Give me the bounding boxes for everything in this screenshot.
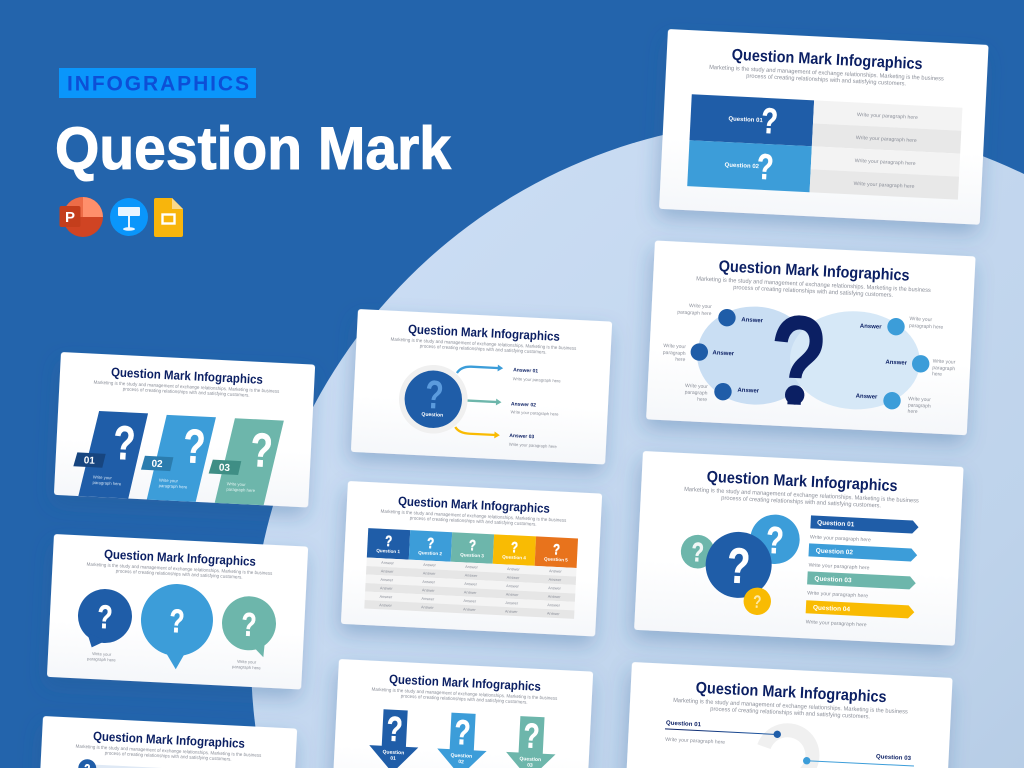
paragraph rows: Write your paragraph here — [853, 181, 915, 190]
heading: Question Mark Infographics — [718, 258, 910, 285]
column header: question 1 — [367, 528, 410, 560]
answer 03 text: Write your paragraph here — [509, 442, 558, 449]
answer labels: Answer — [885, 360, 908, 367]
text block: Marketing is the study and management of exchange relationships. Marketing is the business — [709, 65, 944, 83]
answer table: Answer — [507, 567, 521, 572]
left paragraphs: paragraph — [663, 350, 686, 357]
panel: circles and ribbons slide — [634, 451, 964, 646]
answer 03 text — [509, 433, 558, 449]
column header: question 5 — [535, 536, 578, 568]
text block: process of creating relationships with and satisfying customers. — [420, 343, 547, 356]
arrow: question 03: Question — [519, 756, 541, 763]
arrow: answer 02 — [467, 398, 501, 405]
heading: Question Mark Infographics — [408, 322, 560, 344]
text block: process of creating relationships with and satisfying customers. — [123, 386, 250, 399]
answer table: Answer — [548, 586, 562, 591]
bubble 3 text: Write your — [237, 659, 257, 665]
answer labels — [710, 316, 910, 402]
text block — [371, 687, 558, 707]
bubble 1: ? — [97, 598, 113, 635]
answer table: Answer — [464, 582, 478, 587]
question 01 row — [689, 94, 814, 146]
answer table: Answer — [422, 580, 436, 584]
answer 01 text: Write your paragraph here — [513, 376, 561, 383]
answer table: Answer — [422, 588, 435, 593]
column header: question 1: Question 1 — [376, 548, 401, 554]
column header: question 2: Question 2 — [418, 550, 443, 556]
answer table: Answer — [421, 605, 435, 610]
answer labels: Answer — [860, 324, 882, 331]
column header: question 3: ? — [469, 537, 476, 554]
arrow: question 01: ? — [386, 709, 404, 749]
text block: Marketing is the study and management of exchange relationships. Marketing is the business — [673, 698, 908, 716]
paragraph rows: Write your paragraph here — [857, 112, 918, 121]
ribbon: question 04: Question 04 — [813, 604, 851, 613]
icon: keynote — [110, 198, 148, 236]
answer table: Answer — [421, 597, 435, 601]
text block: process of creating relationships with and satisfying customers. — [710, 707, 870, 721]
bubble 3 text: paragraph here — [232, 664, 262, 670]
heading: Question Mark Infographics — [111, 365, 263, 387]
ribbon: question 03: Write your paragraph here — [807, 590, 868, 599]
arrow: answer 01 — [457, 364, 502, 375]
left paragraphs: Write your — [689, 303, 712, 310]
answer table: Answer — [547, 603, 561, 608]
answer table: Answer — [379, 595, 393, 599]
block 02: paragraph here — [159, 483, 188, 489]
arrow: question 01 — [368, 709, 420, 768]
block 02: 02 — [151, 459, 163, 470]
question 01 timeline — [664, 721, 781, 748]
column header: question 5: ? — [553, 541, 560, 559]
answer bar — [86, 764, 197, 768]
arrow: question 02 — [436, 712, 488, 768]
block 03: ? — [249, 424, 274, 478]
block 01: Write your — [93, 474, 113, 480]
arrow: question 01: 01 — [390, 756, 396, 762]
answer table: Answer — [379, 603, 393, 608]
answer table: Answer — [549, 578, 562, 582]
answer table: Answer — [423, 571, 436, 576]
left paragraphs: paragraph here — [677, 309, 712, 317]
text block — [93, 380, 280, 400]
big question mark: ? — [766, 287, 831, 433]
arrow: question 02: 02 — [458, 759, 464, 765]
column header: question 1: ? — [385, 533, 393, 550]
column header: question 4 — [493, 534, 536, 566]
block 03: Write your — [227, 481, 246, 487]
right answer markers — [883, 318, 932, 411]
answer table: Answer — [463, 599, 477, 604]
text block: process of creating relationships with and satisfying customers. — [746, 74, 906, 88]
answer table: Answer — [506, 584, 520, 589]
column header: question 3 — [451, 532, 494, 564]
answer table: Answer — [463, 607, 477, 612]
block 02: Write your — [159, 478, 179, 484]
heading: Question Mark Infographics — [104, 547, 256, 569]
text block: Marketing is the study and management of exchange relationships. Marketing is the business — [75, 744, 262, 759]
panel: cropped timeline slide — [623, 662, 953, 768]
paragraph rows: Write your paragraph here — [855, 158, 916, 167]
text block: process of creating relationships with and satisfying customers. — [105, 750, 232, 763]
block 02: ? — [182, 420, 207, 474]
icon: powerpoint — [60, 197, 103, 237]
question 01 row: ? — [760, 100, 779, 142]
yellow question circle — [743, 587, 772, 616]
heading: Question Mark Infographics — [731, 47, 923, 73]
yellow question circle: ? — [753, 592, 762, 612]
answer table — [364, 558, 577, 619]
text block: process of creating relationships with and satisfying customers. — [410, 515, 537, 528]
answer table: Answer — [381, 569, 394, 574]
answer table: Answer — [505, 609, 518, 614]
ribbon: question 01: Question 01 — [817, 520, 855, 528]
text block: Marketing is the study and management of exchange relationships. Marketing is the business — [371, 687, 558, 702]
panel: venn answers slide — [646, 240, 976, 441]
bubble 3: ? — [241, 605, 257, 643]
ribbon: question 01 — [810, 515, 919, 546]
block 03 — [207, 417, 284, 506]
bubble 2 — [139, 582, 215, 671]
right paragraphs: Write your — [908, 396, 931, 403]
dark question circle: ? — [726, 537, 751, 594]
arrow: question 02: ? — [454, 713, 471, 753]
answer table: Answer — [549, 569, 563, 574]
column header: question 2: ? — [427, 535, 435, 552]
text block — [390, 337, 577, 357]
answer labels: Answer — [855, 394, 878, 401]
answer table: Answer — [464, 590, 477, 595]
question 02 row: Question 02 — [724, 162, 760, 170]
panel: stepped blocks slide — [54, 352, 315, 507]
question 03 timeline: Question 03 — [876, 754, 912, 762]
text block: process of creating relationships with and satisfying customers. — [401, 693, 528, 706]
paragraph rows: Write your paragraph here — [856, 135, 917, 144]
question 02 row — [687, 140, 812, 192]
panel: cropped left slide — [36, 716, 297, 768]
text block: process of creating relationships with and satisfying customers. — [116, 568, 243, 581]
left paragraphs: here — [697, 397, 707, 403]
text block: process of creating relationships with and satisfying customers. — [733, 285, 893, 299]
ribbon: question 01: Write your paragraph here — [810, 534, 871, 543]
left ellipse — [695, 304, 815, 407]
panel: five column table slide — [341, 481, 602, 636]
right paragraphs: paragraph — [908, 402, 931, 410]
question 01 row: Question 01 — [728, 116, 764, 124]
left paragraphs: here — [675, 357, 686, 363]
answer labels: Answer — [741, 317, 764, 324]
block 01: ? — [112, 417, 137, 471]
left paragraphs: Write your — [685, 383, 708, 390]
answer table: Answer — [507, 576, 520, 580]
large light circle — [251, 120, 1024, 768]
answer 01 text — [513, 367, 562, 383]
right paragraphs — [905, 316, 958, 417]
heading: Question Mark Infographics — [695, 680, 887, 706]
text block — [86, 562, 273, 582]
heading: Question Mark Infographics — [706, 469, 898, 495]
answer table: Answer — [423, 563, 437, 568]
question 02 row: ? — [756, 146, 775, 187]
right ellipse — [788, 308, 922, 412]
bubble 3 text — [232, 659, 262, 670]
answer table: Answer — [380, 586, 393, 591]
question circle — [78, 759, 97, 768]
ribbon: question 03: Question 03 — [814, 575, 852, 584]
title: Question Mark — [55, 115, 452, 182]
arrow: answer 03 — [455, 427, 499, 438]
answer 01 text: Answer 01 — [513, 367, 538, 375]
arrow: question 03: ? — [522, 716, 540, 756]
right paragraphs: here — [932, 371, 942, 378]
bubble 1 — [76, 588, 133, 649]
bubble 2: ? — [169, 602, 185, 640]
block 02 — [139, 414, 216, 503]
arrow: question 03 — [505, 715, 557, 768]
panel: answers flow slide — [351, 309, 612, 464]
dark question circle — [704, 530, 773, 599]
text block: Marketing is the study and management of exchange relationships. Marketing is the business — [93, 380, 280, 395]
answer table: Answer — [548, 595, 561, 599]
arrow: question 02: Question — [450, 753, 472, 760]
arrow: question 01: Question — [382, 749, 404, 756]
text block — [75, 744, 262, 764]
right paragraphs: Write your — [909, 316, 933, 323]
left paragraphs: paragraph — [685, 390, 708, 397]
text block — [380, 509, 567, 529]
answer labels: Answer — [737, 388, 760, 395]
answer 02 text: Write your paragraph here — [510, 409, 559, 417]
left paragraphs: Write your — [663, 343, 686, 350]
block 03: paragraph here — [226, 487, 256, 493]
blue question circle: ? — [765, 520, 785, 563]
badge: infographics: INFOGRAPHICS — [67, 72, 249, 96]
panel: speech bubbles slide — [47, 534, 308, 689]
answer table: Answer — [465, 573, 478, 578]
question 01 timeline: Question 01 — [666, 721, 702, 728]
ribbon: question 04: Write your paragraph here — [806, 619, 867, 628]
icon: grey question arc — [762, 729, 814, 768]
answer 02 text: Answer 02 — [511, 401, 536, 409]
blue question circle — [749, 513, 801, 565]
right paragraphs: here — [907, 409, 918, 415]
heading: Question Mark Infographics — [398, 494, 550, 516]
right paragraphs: Write your — [932, 358, 956, 366]
icon: google slides — [154, 198, 183, 237]
answer table: Answer — [505, 601, 519, 606]
bubble 1 text — [87, 651, 117, 663]
answer table: Answer — [380, 578, 394, 582]
central question circle: Question — [421, 412, 443, 419]
text block: Marketing is the study and management of exchange relationships. Marketing is the business — [86, 562, 273, 577]
answer 02 text — [510, 401, 560, 417]
heading: Question Mark Infographics — [93, 729, 245, 751]
text block: process of creating relationships with and satisfying customers. — [721, 496, 881, 510]
paragraph rows — [810, 100, 962, 200]
answer 03 text: Answer 03 — [509, 433, 535, 440]
ribbon: question 02: Write your paragraph here — [808, 562, 870, 571]
question 03 timeline — [803, 751, 914, 768]
ribbon: question 02 — [808, 543, 917, 574]
central question circle: ? — [424, 373, 445, 418]
teal question circle — [680, 534, 715, 569]
block 03: 03 — [219, 462, 231, 474]
answer table: Answer — [465, 565, 479, 570]
column header: question 3: Question 3 — [460, 552, 484, 558]
central question circle — [397, 363, 469, 435]
text block: Marketing is the study and management of exchange relationships. Marketing is the business — [390, 337, 577, 352]
bubble 3 — [220, 595, 277, 658]
block 01 — [72, 410, 148, 499]
left paragraphs — [660, 302, 712, 403]
answer labels: Answer — [712, 350, 735, 357]
teal question circle: ? — [691, 537, 705, 568]
text block: Marketing is the study and management of exchange relationships. Marketing is the business — [380, 509, 567, 524]
right paragraphs: paragraph here — [909, 323, 944, 331]
answer table: Answer — [381, 561, 395, 565]
text block: Marketing is the study and management of exchange relationships. Marketing is the business — [696, 276, 931, 294]
icon: powerpoint: P — [65, 209, 75, 226]
bubble 1 text: paragraph here — [87, 656, 117, 663]
column header: question 5: Question 5 — [544, 556, 568, 563]
left answer markers — [688, 307, 736, 401]
column header: question 4: ? — [511, 539, 518, 557]
column header: question 2 — [409, 530, 452, 562]
answer table: Answer — [506, 592, 519, 597]
answer table: Answer — [547, 612, 560, 616]
ribbon: question 02: Question 02 — [816, 548, 853, 556]
right paragraphs: paragraph — [932, 365, 955, 372]
ribbon: question 04 — [805, 600, 915, 631]
panel: down arrows slide — [332, 659, 593, 768]
block 01: 01 — [83, 455, 96, 467]
bubble 1 text: Write your — [92, 651, 112, 657]
block 01: paragraph here — [92, 480, 122, 486]
panel: table slide — [659, 29, 989, 225]
question 01 timeline: Write your paragraph here — [665, 737, 725, 746]
text block: Marketing is the study and management of exchange relationships. Marketing is the business — [684, 487, 919, 505]
ribbon: question 03 — [806, 571, 916, 602]
heading: Question Mark Infographics — [389, 672, 541, 694]
column header: question 4: Question 4 — [502, 554, 526, 560]
